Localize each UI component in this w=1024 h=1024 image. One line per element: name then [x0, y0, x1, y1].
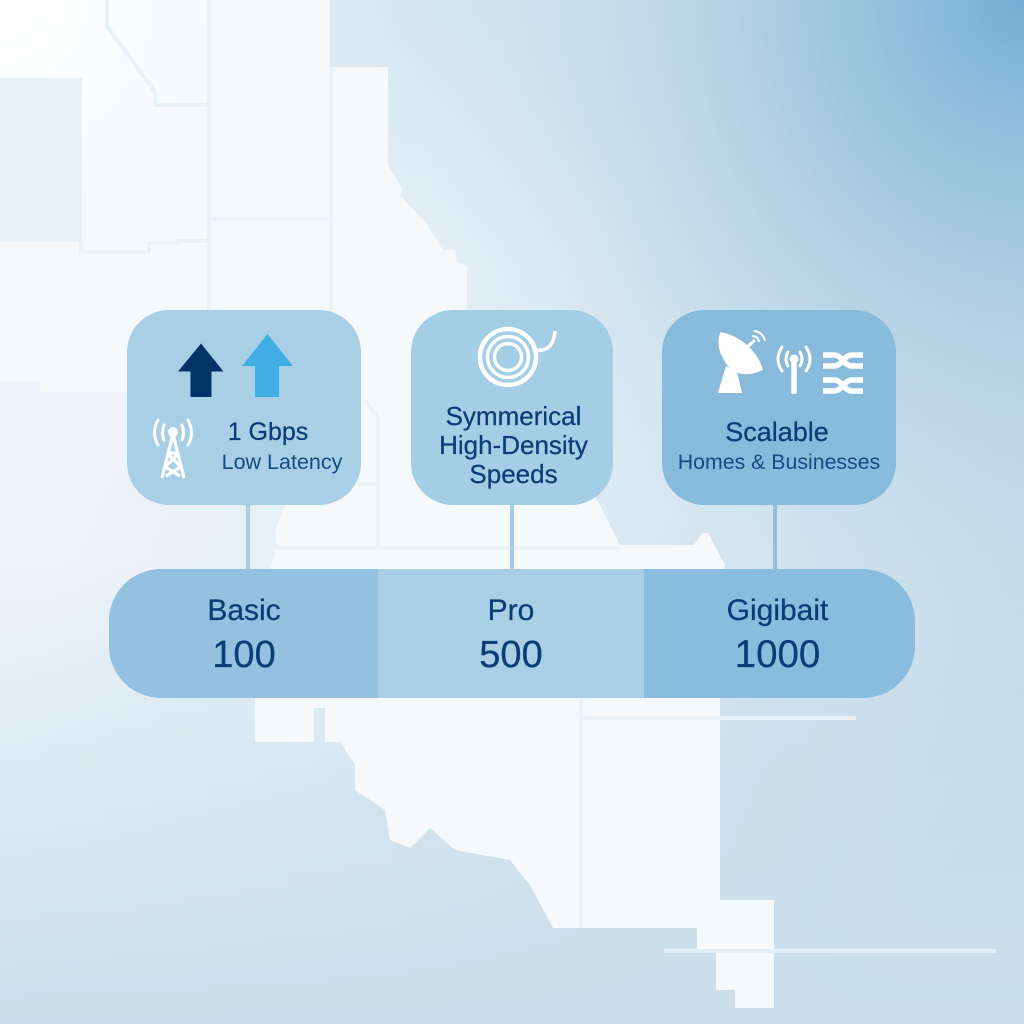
icon: satellite dish — [718, 330, 766, 393]
icon: dark arrow — [178, 344, 224, 397]
text: symmetrical high-density speeds: Symmerical — [446, 401, 581, 431]
panel: scalable card — [662, 310, 896, 505]
value: 1000: 1000 — [735, 633, 820, 676]
icon: switch links — [823, 352, 863, 394]
label: pro: Pro — [488, 594, 534, 627]
text: homes and businesses: Homes & Businesses — [678, 450, 880, 474]
text: 1 Gbps: 1 Gbps — [228, 418, 308, 446]
text: symmetrical high-density speeds: Speeds — [469, 459, 558, 489]
icon: fiber coil — [478, 326, 557, 388]
panel: tier bar — [109, 569, 915, 698]
label: basic: Basic — [207, 594, 281, 627]
panel: speed card — [127, 310, 361, 505]
value: 100: 100 — [212, 634, 276, 676]
icon: antenna — [776, 345, 812, 394]
value: 500: 500 — [479, 634, 543, 676]
text: low latency: Low Latency — [222, 450, 342, 474]
tier: gigibait — [644, 569, 915, 698]
text: symmetrical high-density speeds — [439, 401, 588, 489]
panel: symmetrical speeds card — [411, 310, 613, 505]
text: symmetrical high-density speeds: High-Density — [439, 430, 588, 460]
text: scalable: Scalable — [725, 417, 829, 447]
tier: pro — [378, 569, 644, 698]
label: gigibait: Gigibait — [727, 594, 828, 627]
tier: basic — [109, 569, 378, 698]
icon: radio tower — [153, 418, 193, 478]
icon: light arrow — [242, 334, 293, 397]
